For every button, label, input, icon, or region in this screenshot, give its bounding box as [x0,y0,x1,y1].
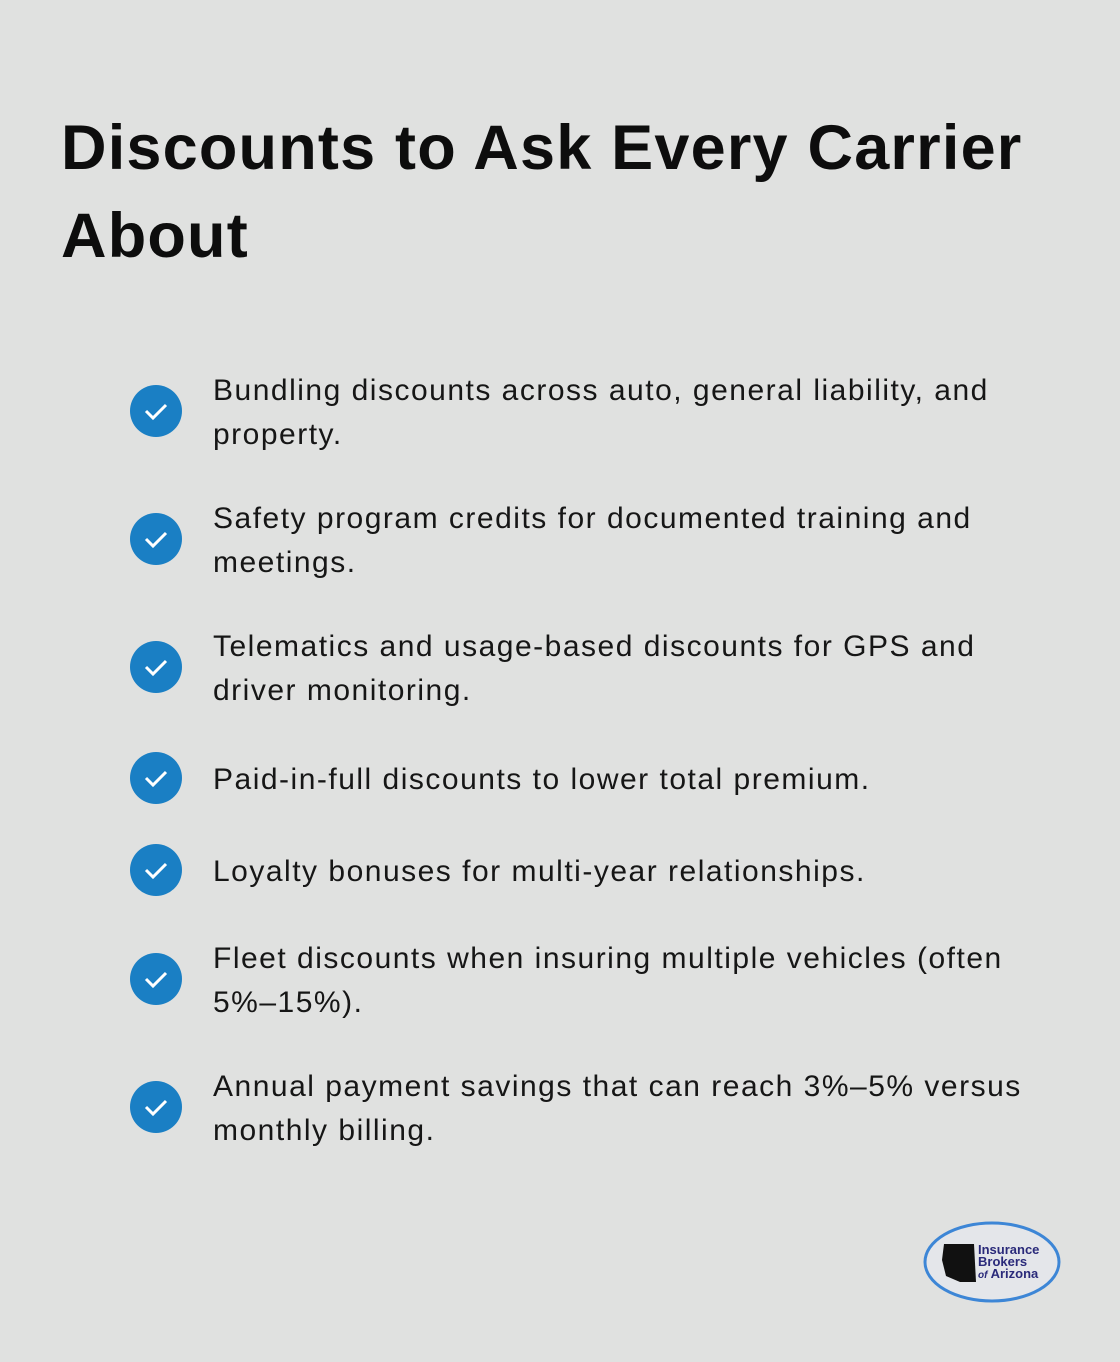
logo: of Arizona [978,1266,1039,1281]
logo [924,1222,1060,1302]
logo: Brokers [978,1254,1027,1269]
item: annual payment [130,1070,1022,1147]
item: fleet: 5%–15%). [213,986,363,1019]
item: annual payment: monthly billing. [213,1114,435,1147]
item: bundling [130,374,989,451]
title [61,113,1023,271]
logo: Insurance [978,1242,1039,1257]
title: About [61,201,249,271]
item: bundling: property. [213,418,343,451]
item: safety: Safety program credits for documented training and [213,502,972,535]
item: loyalty: Loyalty bonuses for multi-year relationships. [213,855,866,888]
item: paid in full: Paid-in-full discounts to lower total premium. [213,763,871,796]
item: telematics: Telematics and usage-based discounts for GPS and [213,630,975,663]
item: fleet [130,942,1003,1019]
item: bundling: Bundling discounts across auto, general liability, and [213,374,989,407]
item: paid in full [130,752,871,804]
item: safety [130,502,972,579]
item: safety: meetings. [213,546,357,579]
item: loyalty [130,844,866,896]
item: annual payment: Annual payment savings that can reach 3%–5% versus [213,1070,1022,1103]
item: telematics [130,630,975,707]
item: telematics: driver monitoring. [213,674,472,707]
item: fleet: Fleet discounts when insuring multiple vehicles (often [213,942,1003,975]
title: Discounts to Ask Every Carrier [61,113,1023,183]
